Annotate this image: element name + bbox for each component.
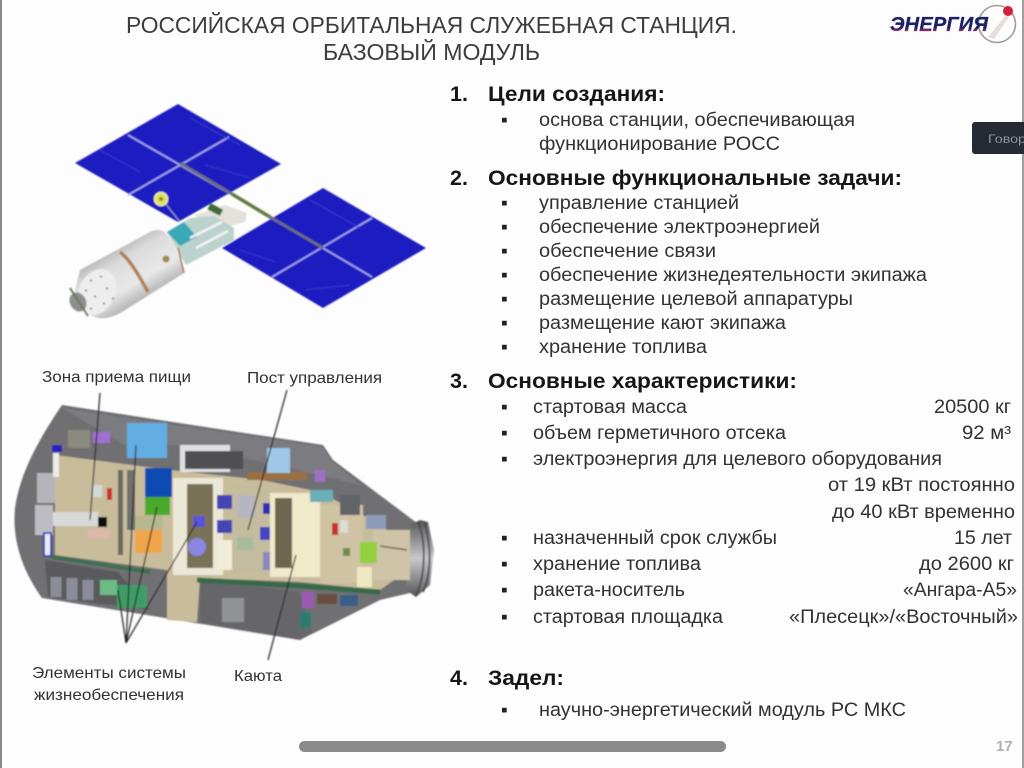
section 3: main characteristics: до 2600 кг: [919, 553, 1014, 575]
section 1: goals: ▪: [501, 110, 508, 131]
antenna: [154, 192, 180, 222]
section 3: main characteristics: «Ангара-А5»: [903, 579, 1017, 601]
section 3: main characteristics: от 19 кВт постоянно: [828, 474, 1015, 496]
section 2: main functional tasks: обеспечение электроэнергией: [539, 216, 820, 238]
section 3: main characteristics: «Плесецк»/«Восточный»: [789, 606, 1018, 628]
overlay tooltip: speaking: Говор: [988, 132, 1024, 146]
blue and green racks: [127, 423, 172, 553]
lower equipment: [45, 557, 380, 640]
wall panel: [53, 512, 98, 526]
page number: 17: [996, 738, 1013, 755]
label: life support elements: жизнеобеспечения: [34, 687, 184, 704]
solar panel: right: [222, 188, 426, 308]
overlay tooltip: speaking: [972, 122, 1024, 154]
aft docking port: [406, 520, 434, 597]
aft green box: [357, 530, 410, 587]
logo: Energia: ЭНЕРГИЯ: [890, 14, 988, 36]
section 4: groundwork: 4.: [450, 666, 468, 690]
title: БАЗОВЫЙ МОДУЛЬ: [323, 38, 540, 65]
label: food zone: Зона приема пищи: [42, 369, 191, 386]
hull: [14, 405, 417, 640]
section 3: main characteristics: ▪: [501, 397, 508, 418]
label: cabin: Каюта: [234, 668, 282, 685]
section 3: main characteristics: [450, 369, 1018, 628]
section 3: main characteristics: ▪: [501, 423, 508, 444]
section 1: goals: 1.: [450, 82, 468, 106]
section 2: main functional tasks: ▪: [501, 241, 508, 262]
section 4: groundwork: [450, 666, 906, 721]
section 2: main functional tasks: [450, 166, 927, 358]
section 1: goals: Цели создания:: [488, 82, 665, 106]
leader lines: [90, 390, 296, 660]
section 2: main functional tasks: ▪: [501, 193, 508, 214]
section 3: main characteristics: до 40 кВт временно: [832, 501, 1015, 523]
section 3: main characteristics: ▪: [501, 607, 508, 628]
section 1: goals: [450, 82, 855, 155]
section 1: goals: основа станции, обеспечивающая: [539, 109, 855, 131]
section 3: main characteristics: ▪: [501, 528, 508, 549]
solar panel: left: [75, 104, 281, 222]
label: life support elements: [32, 665, 186, 704]
title: [126, 11, 737, 65]
section 3: main characteristics: ракета-носитель: [533, 579, 685, 601]
label: life support elements: Элементы системы: [32, 665, 186, 682]
section 2: main functional tasks: хранение топлива: [539, 336, 707, 358]
section 4: groundwork: ▪: [501, 700, 508, 721]
section 3: main characteristics: 20500 кг: [934, 396, 1011, 418]
section 3: main characteristics: ▪: [501, 554, 508, 575]
inner deck: [55, 455, 410, 622]
section 2: main functional tasks: Основные функциональные задачи:: [488, 166, 902, 190]
illustration: station exterior with solar panels: [66, 104, 426, 321]
section 2: main functional tasks: ▪: [501, 217, 508, 238]
section 3: main characteristics: электроэнергия для целевого оборудования: [533, 448, 942, 470]
section 2: main functional tasks: размещение целевой аппаратуры: [539, 288, 853, 310]
upper equipment: [68, 430, 386, 529]
section 2: main functional tasks: обеспечение связи: [539, 240, 716, 262]
section 2: main functional tasks: ▪: [501, 313, 508, 334]
section 3: main characteristics: назначенный срок службы: [533, 527, 777, 549]
section 3: main characteristics: ▪: [501, 449, 508, 470]
section 4: groundwork: Задел:: [488, 666, 564, 690]
section 3: main characteristics: стартовая площадка: [533, 606, 723, 628]
divider module: [173, 478, 232, 575]
section 2: main functional tasks: обеспечение жизнедеятельности экипажа: [539, 264, 927, 286]
scrollbar: [299, 741, 726, 752]
section 3: main characteristics: ▪: [501, 580, 508, 601]
end walls: [37, 473, 55, 503]
service section: [167, 203, 247, 265]
illustration: station cutaway interior: [14, 390, 434, 660]
section 2: main functional tasks: управление станцией: [539, 192, 739, 214]
section 3: main characteristics: объем герметичного отсека: [533, 422, 786, 444]
label: control post: Пост управления: [247, 370, 382, 387]
section 1: goals: функционирование РОСС: [539, 133, 780, 155]
section 3: main characteristics: 15 лет: [954, 527, 1012, 549]
logo: Energia: [890, 6, 1016, 42]
section 4: groundwork: научно-энергетический модуль РС МКС: [539, 699, 906, 721]
section 3: main characteristics: Основные характеристики:: [488, 369, 797, 393]
main cylinder: [66, 230, 184, 321]
section 3: main characteristics: 92 м³: [962, 422, 1011, 444]
section 2: main functional tasks: 2.: [450, 166, 468, 190]
section 2: main functional tasks: ▪: [501, 289, 508, 310]
section 2: main functional tasks: ▪: [501, 265, 508, 286]
section 2: main functional tasks: размещение кают экипажа: [539, 312, 786, 334]
section 3: main characteristics: 3.: [450, 369, 468, 393]
title: РОССИЙСКАЯ ОРБИТАЛЬНАЯ СЛУЖЕБНАЯ СТАНЦИЯ.: [126, 11, 737, 38]
cabin: [270, 493, 363, 583]
section 3: main characteristics: хранение топлива: [533, 553, 701, 575]
section 3: main characteristics: стартовая масса: [533, 396, 687, 418]
control post: [232, 484, 275, 574]
truss: [180, 163, 232, 194]
section 2: main functional tasks: ▪: [501, 337, 508, 358]
